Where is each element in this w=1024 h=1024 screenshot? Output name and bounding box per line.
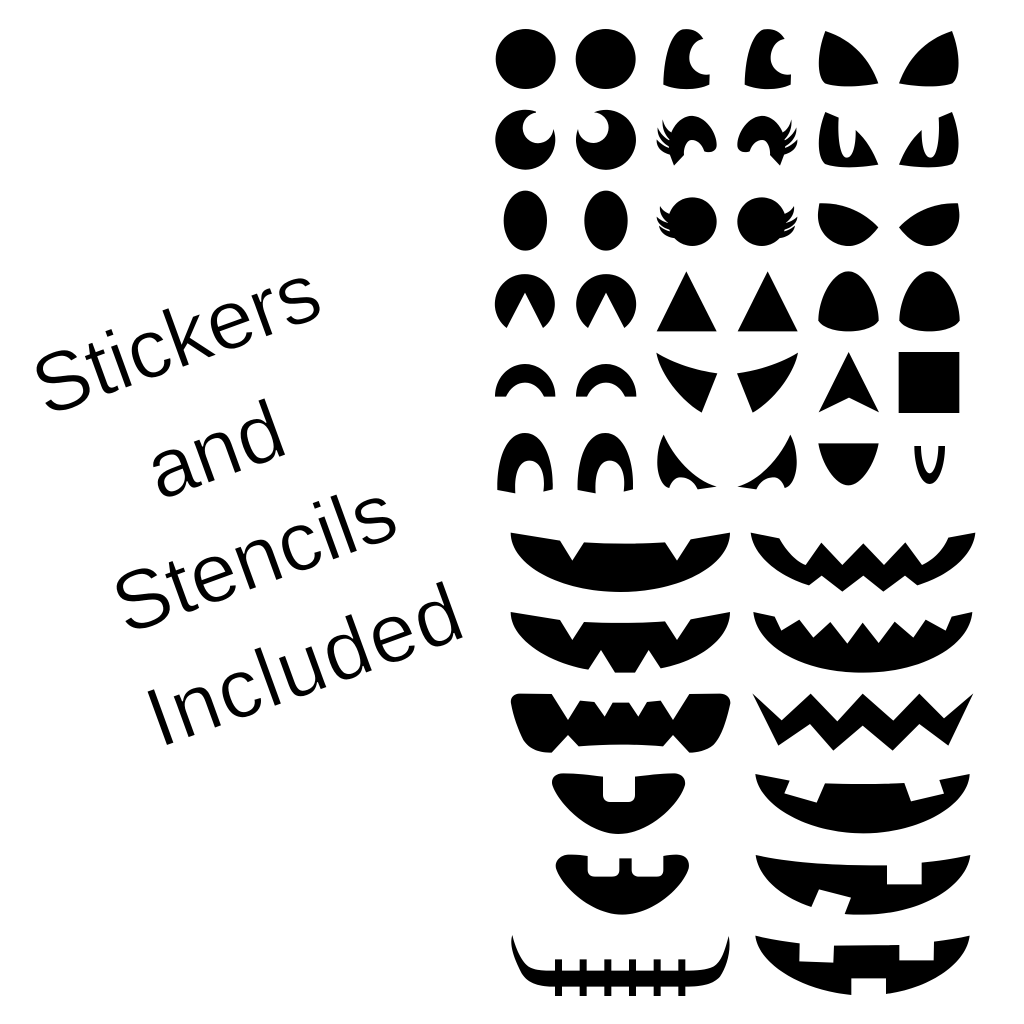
panel: mouth shapes rows 1 to 3 bbox=[511, 533, 975, 753]
icon: triangle right bbox=[738, 271, 798, 331]
icon: round eye right bbox=[576, 29, 636, 89]
icon: boxy toothed mouth bbox=[511, 694, 730, 753]
heading line: Included: Included bbox=[133, 564, 475, 765]
icon: serrated smile bbox=[753, 612, 972, 673]
icon: square nose bbox=[899, 352, 959, 413]
icon: cat eye left bbox=[819, 31, 878, 86]
icon: dome left bbox=[818, 271, 879, 331]
panel: eye shapes rows 1 to 3 bbox=[495, 29, 959, 251]
icon: lashed round eye right bbox=[737, 197, 797, 246]
panel: mouth shapes rows 4 to 6 bbox=[511, 773, 970, 996]
icon: crescent eye left bbox=[663, 29, 710, 89]
heading line: Stencils: Stencils bbox=[100, 463, 408, 652]
icon: lightning zigzag mouth bbox=[752, 693, 973, 751]
icon: dome right bbox=[899, 271, 960, 331]
icon: zigzag smile bbox=[751, 533, 975, 592]
icon: lashed arch eye right bbox=[737, 116, 797, 166]
icon: U shape nose bbox=[914, 446, 945, 484]
icon: oval eye right bbox=[584, 191, 628, 251]
icon: two-fang smile bbox=[511, 533, 730, 592]
icon: crescent eye right bbox=[745, 29, 791, 89]
heading: Stickers and Stencils Included bbox=[20, 243, 475, 765]
icon: four-fang smile bbox=[511, 612, 730, 673]
icon: hooded eye right bbox=[578, 433, 633, 493]
icon: bitten circle eye left bbox=[495, 110, 555, 170]
icon: sleepy eye right bbox=[899, 203, 959, 246]
icon: two tooth mouth bbox=[556, 855, 689, 915]
icon: slit cat eye left bbox=[819, 112, 878, 167]
icon: cat eye right bbox=[899, 31, 959, 86]
heading line: Stickers: Stickers bbox=[20, 243, 333, 434]
icon: angry wedge eye right bbox=[737, 353, 798, 413]
icon: slit cat eye right bbox=[899, 112, 959, 167]
icon: hooded eye left bbox=[497, 433, 553, 493]
icon: arch eye left bbox=[495, 364, 555, 397]
icon: notched circle eye right bbox=[576, 274, 636, 328]
icon: arch eye right bbox=[576, 364, 636, 397]
icon: crooked teeth smile bbox=[756, 855, 970, 915]
icon: notched circle eye left bbox=[495, 274, 555, 328]
icon: fang eye left bbox=[657, 435, 717, 489]
panel: eye and nose shapes rows 4 to 6 bbox=[495, 271, 960, 493]
icon: gap teeth smile bbox=[755, 936, 970, 995]
icon: lashed arch eye left bbox=[657, 116, 717, 166]
icon: block teeth smile bbox=[755, 774, 970, 833]
icon: sleepy eye left bbox=[818, 203, 878, 246]
icon: stitched mouth bbox=[511, 935, 730, 996]
icon: lashed round eye left bbox=[657, 197, 717, 246]
icon: arrow nose bbox=[819, 352, 879, 412]
icon: bitten circle eye right bbox=[576, 110, 636, 170]
icon: fang eye right bbox=[737, 435, 797, 489]
icon: angry wedge eye left bbox=[656, 353, 717, 413]
icon: single tooth mouth bbox=[552, 773, 685, 834]
icon: round eye left bbox=[496, 29, 556, 89]
icon: half oval nose bbox=[818, 443, 879, 485]
heading line: and: and bbox=[133, 382, 297, 518]
icon: oval eye left bbox=[504, 191, 547, 251]
icon: triangle left bbox=[657, 271, 717, 331]
